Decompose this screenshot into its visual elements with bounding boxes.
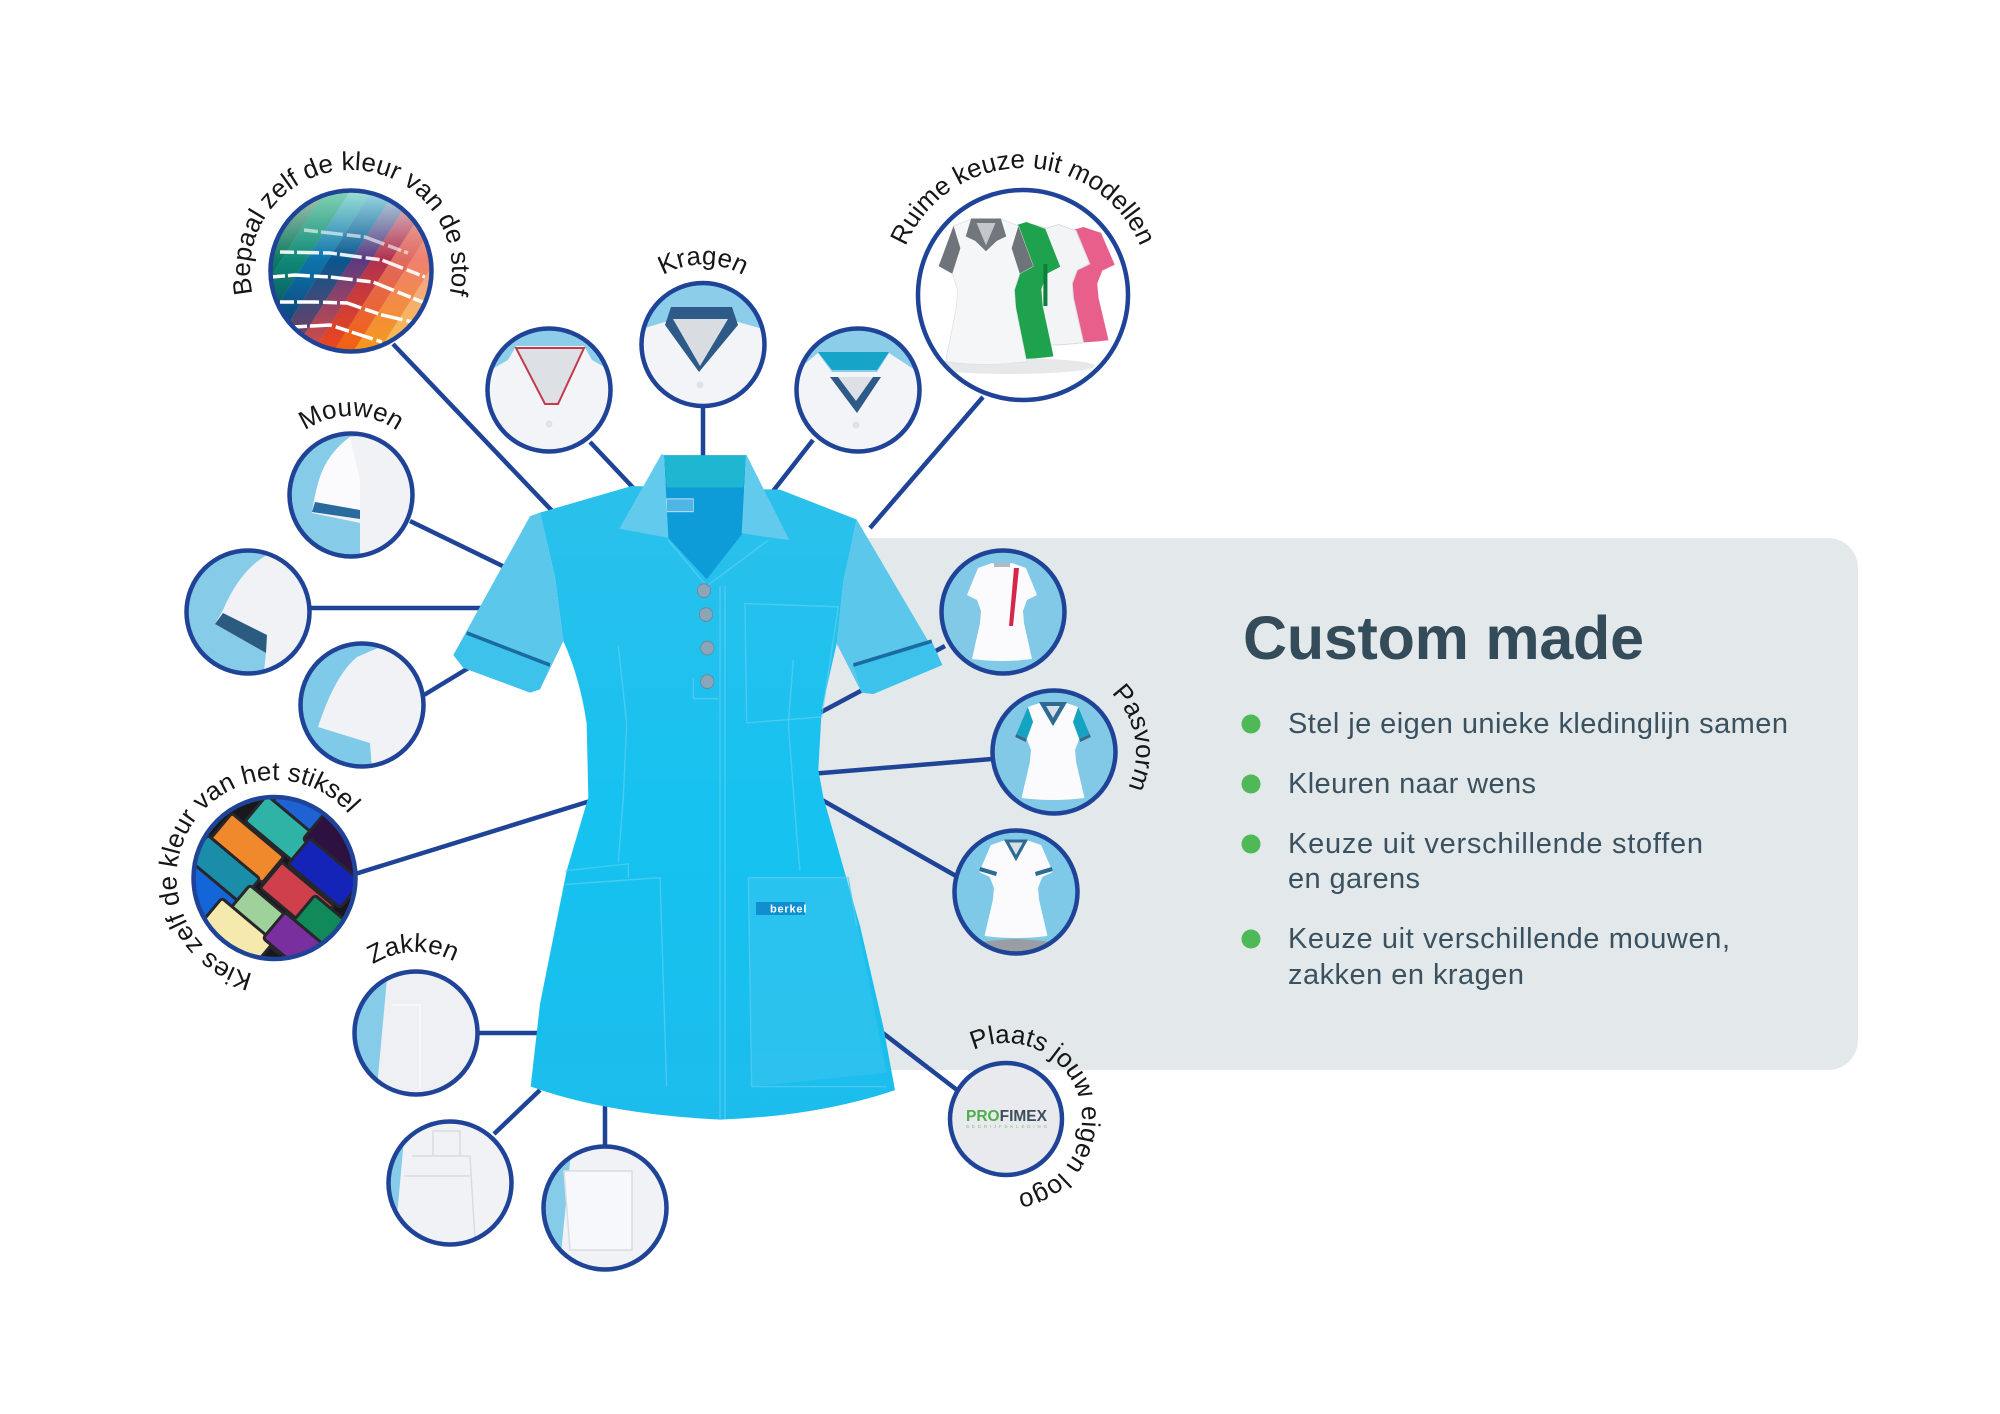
bullet 3: en garens (1288, 863, 1420, 895)
photo: fit option teal sleeves (994, 692, 1114, 812)
photo: thread spools (196, 799, 354, 957)
jacket left collar (619, 454, 668, 538)
photo: collar red piping (490, 330, 608, 449)
ring: pocket 3 (544, 1146, 666, 1270)
pink tunic (1072, 227, 1115, 342)
label: Ruime keuze uit modellen: Ruime keuze uit modellen (890, 152, 1152, 245)
white tunic (1032, 224, 1090, 346)
photo: collar teal (799, 330, 917, 449)
photo: sleeve with wide band (188, 552, 307, 672)
jacket brand label (756, 902, 807, 916)
label: Kies zelf de kleur van het stiksel: Kies zelf de kleur van het stiksel (158, 763, 362, 990)
ring: fit option teal sleeves (992, 690, 1116, 814)
jacket (453, 454, 942, 1120)
ring: colour fan deck (270, 190, 432, 352)
jacket neck label (667, 499, 693, 512)
photo: colour fan deck (272, 192, 430, 350)
heading: Custom made: Custom made (1243, 604, 1644, 672)
label: Zakken: Zakken (366, 933, 457, 964)
bullet 3: Keuze uit verschillende stoffen (1288, 828, 1703, 860)
jacket cuffs (453, 633, 942, 694)
ring: range of models (918, 190, 1128, 400)
bullet 4: Keuze uit verschillende mouwen, (1288, 923, 1730, 955)
photo: fit option red stripe (944, 552, 1062, 672)
jacket body (531, 486, 895, 1120)
label: Mouwen: Mouwen (298, 402, 402, 430)
logo subtext: BEDRIJFSKLEDING (966, 1124, 1047, 1129)
bullet 4: zakken en kragen (1288, 959, 1524, 991)
ring: plain sleeve (300, 644, 424, 766)
ring: fit option navy cuffs (954, 830, 1078, 954)
jacket buttons (697, 584, 714, 688)
jacket lower right pocket tint (748, 878, 887, 1087)
photo: plain sleeve (302, 646, 421, 764)
photo: pocket 3 (546, 1149, 664, 1267)
jacket back collar (664, 455, 746, 487)
logo text PROFIMEX: PROFIMEX (966, 1108, 1047, 1125)
photo: fit option navy cuffs (956, 832, 1076, 952)
ring: thread spools (194, 797, 356, 959)
ring: collar navy (642, 283, 764, 406)
jacket neck inside (664, 455, 746, 579)
label: Bepaal zelf de kleur van de stof: Bepaal zelf de kleur van de stof (233, 151, 469, 298)
panel: custom made background (790, 538, 1858, 1070)
grey and white tunic (939, 218, 1033, 365)
bullet 3 (1242, 828, 1703, 895)
ring: collar teal (796, 328, 920, 452)
bullet list (1242, 708, 1788, 991)
ring: collar red piping (488, 328, 610, 452)
bullet 1: Stel je eigen unieke kledinglijn samen (1288, 708, 1788, 740)
ring: sleeve with navy band (290, 434, 412, 556)
label: Kragen: Kragen (658, 250, 746, 274)
bullet 4 (1242, 923, 1730, 991)
photo: sleeve with navy band (292, 436, 410, 554)
photo: collar navy (644, 285, 762, 404)
green tunic (1014, 222, 1060, 359)
ring: pocket 2 (388, 1122, 512, 1244)
photo: pocket 1 (356, 974, 475, 1092)
jacket seams and pockets (565, 540, 887, 1119)
jacket left sleeve (453, 513, 563, 693)
logo badge (950, 1063, 1062, 1175)
connector lines (310, 344, 992, 1146)
photo: pocket 2 (390, 1124, 509, 1242)
ring: sleeve with wide band (186, 550, 310, 674)
photo: range of models (938, 218, 1115, 374)
label: Plaats jouw eigen logo: Plaats jouw eigen logo (970, 1025, 1101, 1206)
jacket brand label: berkel (770, 904, 807, 916)
bullet 2: Kleuren naar wens (1288, 768, 1536, 800)
ring: fit option red stripe (942, 550, 1064, 674)
jacket right sleeve (837, 520, 942, 694)
jacket piping (467, 633, 932, 665)
tunic shadow (944, 358, 1095, 374)
label: Pasvorm: Pasvorm (1112, 683, 1150, 790)
jacket right collar (742, 454, 789, 540)
ring: pocket 1 (354, 972, 478, 1094)
